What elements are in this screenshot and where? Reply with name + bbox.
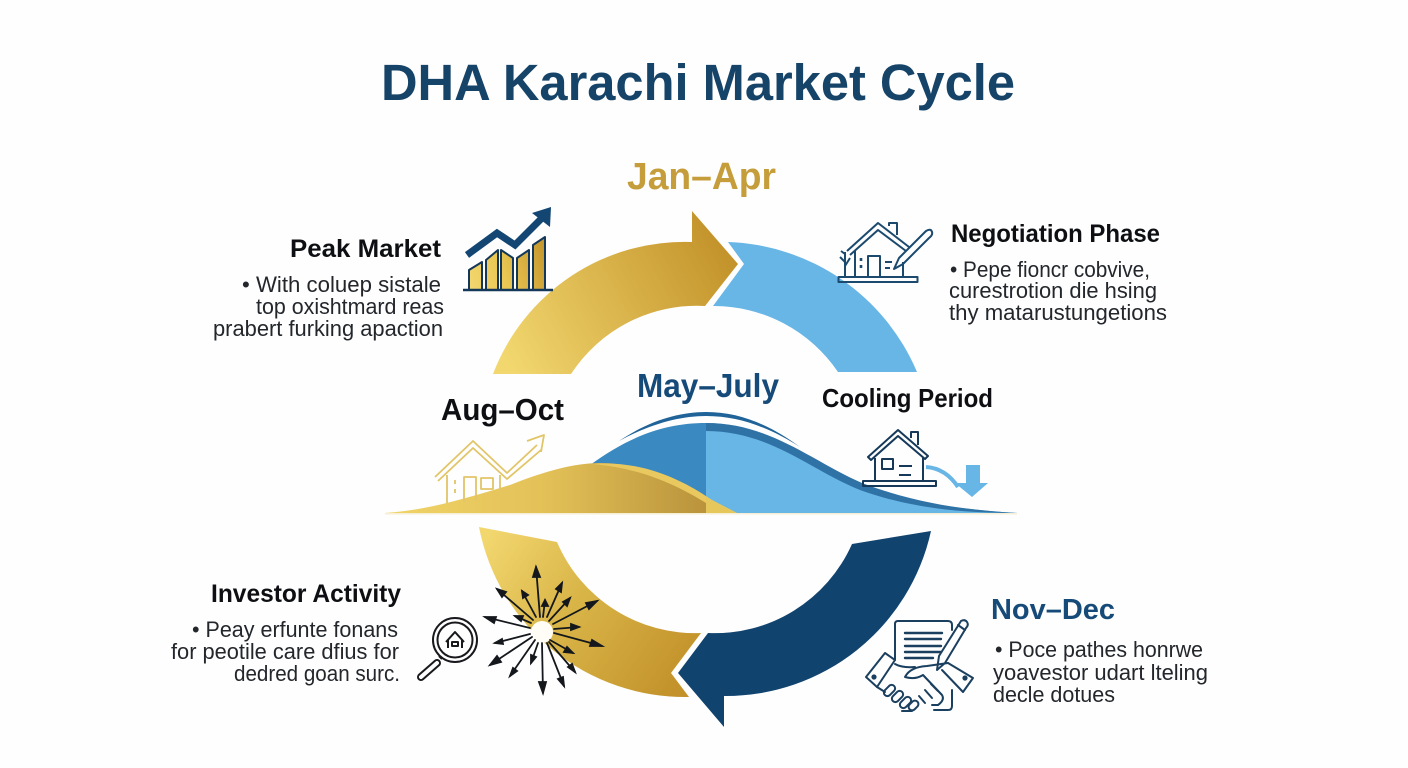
hump: pale baseline bbox=[385, 513, 1017, 514]
icon: gold house with rising arrow bbox=[435, 435, 544, 503]
heading: Negotiation Phase: Negotiation Phase bbox=[951, 220, 1160, 248]
icon: arrow burst bbox=[485, 567, 602, 693]
text block: Nov-Dec bullet bbox=[993, 637, 1208, 707]
hump: dark blue crest band bbox=[706, 423, 1017, 513]
text block: Investor bullet: for peotile care dfius for bbox=[171, 639, 399, 664]
text block: Nov-Dec bullet: • Poce pathes honrwe bbox=[995, 637, 1203, 662]
hump: dark blue left bbox=[590, 423, 706, 497]
arc: gold bottom left bbox=[479, 527, 701, 697]
text block: Peak Market bullet: top oxishtmard reas bbox=[256, 294, 444, 319]
panel: Peak Market bbox=[213, 235, 444, 341]
text block: Nov-Dec bullet: yoavestor udart lteling bbox=[993, 660, 1208, 685]
hump: gold crest bbox=[592, 463, 737, 513]
text block: Peak Market bullet bbox=[213, 272, 444, 341]
arrow: gold top arc bbox=[493, 211, 738, 374]
text block: Negotiation bullet: curestrotion die hsing bbox=[949, 278, 1157, 303]
panel: Negotiation Phase bbox=[949, 220, 1167, 325]
hump: gold bbox=[385, 463, 706, 513]
arc: light blue top right bbox=[713, 242, 917, 372]
text block: Peak Market bullet: • With coluep sistale bbox=[242, 272, 441, 297]
panel: Investor Activity bbox=[171, 580, 401, 686]
icon: house with down arrow bbox=[863, 430, 988, 497]
text block: Investor bullet: dedred goan surc. bbox=[234, 661, 400, 686]
label: May-July: May–July bbox=[637, 367, 780, 404]
text block: Negotiation bullet: • Pepe fioncr cobvive, bbox=[950, 257, 1150, 282]
label: Aug-Oct: Aug–Oct bbox=[441, 392, 564, 427]
label: Cooling Period: Cooling Period bbox=[822, 383, 993, 413]
text block: Negotiation bullet bbox=[949, 257, 1167, 325]
icon: document and handshake bbox=[866, 620, 973, 712]
panel: Nov-Dec bbox=[991, 594, 1208, 707]
text block: Investor bullet: • Peay erfunte fonans bbox=[192, 617, 398, 642]
text block: Nov-Dec bullet: decle dotues bbox=[993, 682, 1115, 707]
icon: rising bar chart bbox=[463, 207, 553, 290]
heading: Peak Market: Peak Market bbox=[290, 235, 442, 263]
icon: house with pen bbox=[838, 223, 932, 282]
label: Jan-Apr: Jan–Apr bbox=[627, 156, 776, 198]
text block: Negotiation bullet: thy matarustungetions bbox=[949, 300, 1167, 325]
hump: gold right tip bbox=[706, 497, 737, 513]
arrow: navy bottom right bbox=[678, 531, 931, 727]
text block: Investor bullet bbox=[171, 617, 400, 686]
heading: Investor Activity: Investor Activity bbox=[211, 580, 401, 608]
icon: magnifier with house bbox=[421, 618, 477, 677]
hump: thin crest arc bbox=[619, 412, 800, 447]
title: DHA Karachi Market Cycle bbox=[381, 54, 1015, 111]
chart: market hump curves bbox=[385, 412, 1017, 514]
text block: Peak Market bullet: prabert furking apaction bbox=[213, 316, 443, 341]
heading: Nov-Dec: Nov–Dec bbox=[991, 594, 1115, 626]
hump: light blue right bbox=[700, 423, 1017, 513]
